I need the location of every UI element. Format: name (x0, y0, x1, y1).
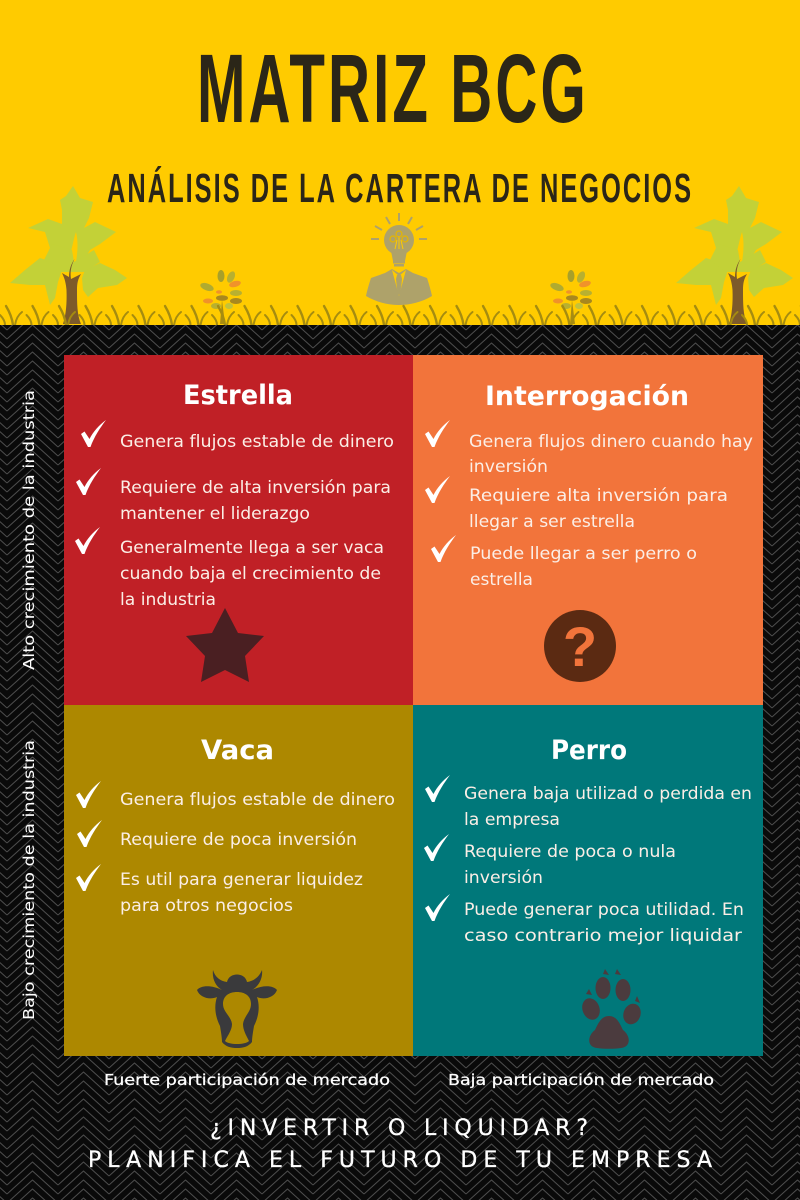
check mark (425, 420, 450, 447)
check mark (81, 420, 106, 447)
text: Estrella point 3: la industria (120, 590, 216, 609)
text: Interrogación point 3: Puede llegar a ser perro o (470, 544, 697, 563)
text: Interrogación point 1: Genera flujos dinero cuando hay (469, 432, 753, 451)
text: Vaca point 3: para otros negocios (120, 896, 293, 915)
panel: Perro (413, 705, 763, 1056)
text: Perro point 2: Requiere de poca o nula (464, 842, 676, 861)
background: yellow sky (0, 0, 800, 326)
check mark (76, 864, 101, 891)
text: Perro point 3 (464, 900, 744, 945)
text: Perro point 1: la empresa (464, 810, 560, 829)
text: Interrogación point 2: llegar a ser estrella (469, 512, 635, 531)
icon: right bush (549, 270, 592, 324)
subtitle: ANÁLISIS DE LA CARTERA DE NEGOCIOS (107, 166, 691, 212)
background: black chevron ground (0, 325, 800, 1200)
title: MATRIZ BCG (197, 35, 586, 143)
panel: Estrella (64, 355, 414, 706)
text: Perro point 1: Genera baja utilizad o perdida en (464, 784, 752, 803)
text: Estrella point 2: mantener el liderazgo (120, 504, 310, 523)
check mark (75, 527, 100, 554)
check mark (425, 476, 450, 503)
icon: left tree (10, 186, 127, 324)
text: Interrogación point 3 (470, 544, 697, 589)
icon: question mark: ? (563, 615, 597, 678)
heading: Vaca: Vaca (201, 735, 274, 766)
heading: Interrogación: Interrogación (485, 381, 689, 412)
panel: Interrogación (413, 355, 763, 706)
text: Estrella point 3 (120, 538, 384, 609)
icon: right tree (676, 186, 793, 324)
text: Vaca point 1: Genera flujos estable de dinero (120, 790, 395, 809)
text: Interrogación point 1: inversión (469, 457, 548, 476)
icon: question mark (544, 610, 616, 682)
text: Perro point 2 (464, 842, 676, 887)
check mark (425, 894, 450, 921)
text: Perro point 3: caso contrario mejor liquidar (464, 926, 742, 945)
closing line 1: ¿INVERTIR O LIQUIDAR? (210, 1116, 588, 1141)
text: Interrogación point 3: estrella (470, 570, 533, 589)
text: Perro point 1 (464, 784, 752, 829)
icon: cow head (197, 970, 277, 1048)
check mark (77, 820, 102, 847)
panel: Vaca (64, 705, 414, 1056)
text: Estrella point 3: cuando baja el crecimiento de (120, 564, 381, 583)
text: Estrella point 1: Genera flujos estable de dinero (120, 432, 394, 451)
axis label: Alto crecimiento: Alto crecimiento de la industria (20, 390, 38, 670)
check mark (425, 775, 450, 802)
axis label: Fuerte participación: Fuerte participación de mercado (104, 1071, 390, 1089)
text: Interrogación point 2: Requiere alta inversión para (469, 486, 728, 505)
heading: Perro: Perro (551, 735, 627, 766)
grass strip (0, 306, 800, 325)
closing line 2: PLANIFICA EL FUTURO DE TU EMPRESA (88, 1148, 712, 1173)
text: Vaca point 3: Es util para generar liquidez (120, 870, 363, 889)
text: Interrogación point 2 (469, 486, 728, 531)
axis label: Bajo crecimiento: Bajo crecimiento de la industria (20, 740, 38, 1020)
text: Vaca point 2: Requiere de poca inversión (120, 830, 357, 849)
text: Perro point 2: inversión (464, 868, 543, 887)
icon: paw print (579, 969, 644, 1049)
heading: Estrella: Estrella (183, 380, 293, 411)
icon: star (186, 608, 264, 682)
check mark (76, 468, 101, 495)
icon: businessman with light bulb (366, 213, 432, 305)
check mark (424, 834, 449, 861)
icon: left bush (199, 270, 242, 324)
text: Perro point 3: Puede generar poca utilidad. En (464, 900, 744, 919)
text: Interrogación point 1 (469, 432, 753, 476)
text: Estrella point 3: Generalmente llega a ser vaca (120, 538, 384, 557)
text: Vaca point 3 (120, 870, 363, 915)
check mark (76, 781, 101, 808)
check mark (431, 535, 456, 562)
axis label: Baja participación: Baja participación de mercado (448, 1071, 714, 1089)
text: Estrella point 2 (120, 478, 391, 523)
text: Estrella point 2: Requiere de alta inversión para (120, 478, 391, 497)
